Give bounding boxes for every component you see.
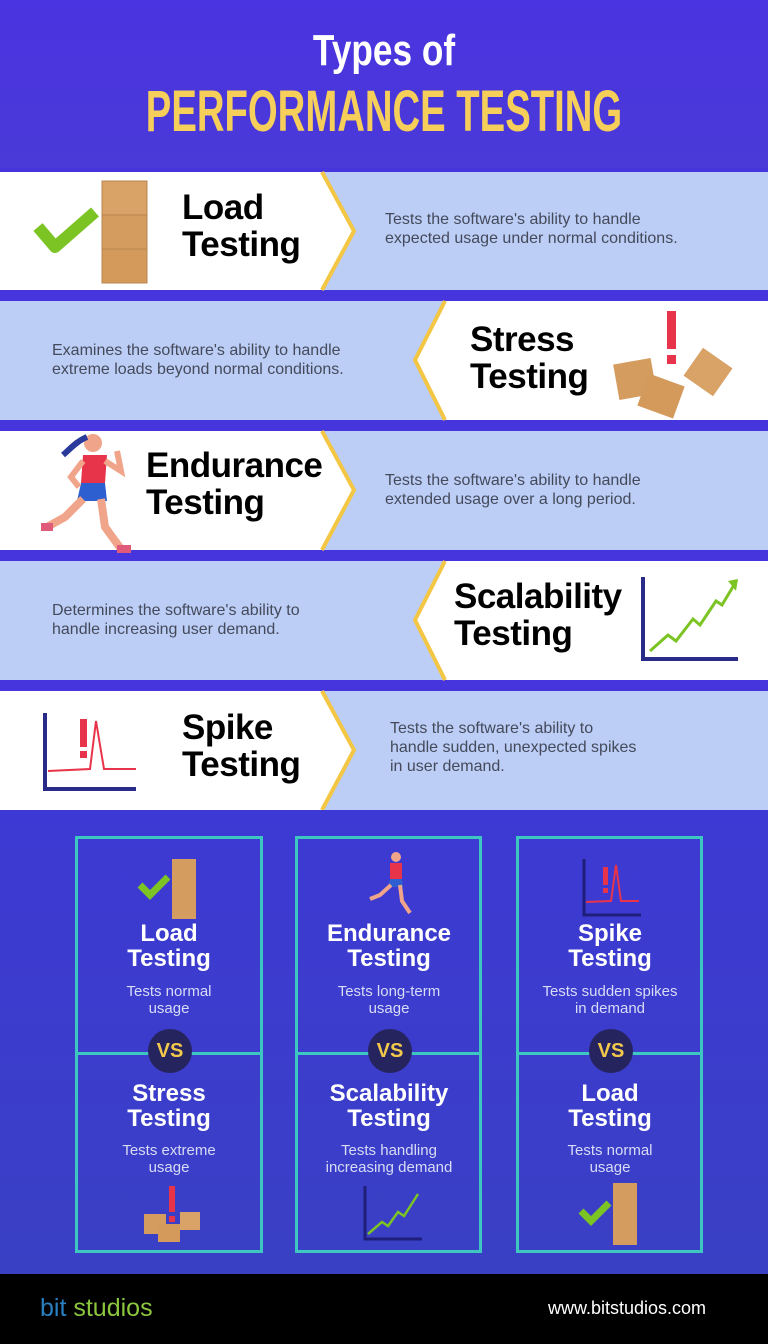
heading: Endurance — [146, 446, 322, 485]
icon: runner — [369, 852, 412, 914]
column 1: Tests extreme — [122, 1142, 216, 1159]
description: extreme loads beyond normal conditions. — [52, 361, 344, 378]
description — [52, 342, 344, 378]
description: Tests the software's ability to — [390, 720, 593, 737]
row: endurance testing — [41, 434, 641, 553]
description: Determines the software's ability to — [52, 602, 300, 619]
description: Examines the software's ability to handle — [52, 342, 341, 359]
column 3: in demand — [575, 1000, 645, 1017]
icon: spike chart — [43, 713, 136, 791]
column 2: Testing — [347, 945, 431, 972]
icon: check and boxes — [34, 180, 148, 284]
column 2 — [295, 836, 482, 1253]
column 1: Tests normal — [126, 983, 212, 1000]
icon: check and boxes — [138, 859, 196, 919]
heading — [182, 188, 300, 264]
description: in user demand. — [390, 758, 505, 775]
header — [0, 0, 768, 168]
header: PERFORMANCE TESTING — [146, 79, 622, 144]
column 3: Load — [581, 1080, 639, 1107]
column 1: Load — [140, 920, 198, 947]
heading: Stress — [470, 320, 574, 359]
column 1: VS — [157, 1040, 183, 1062]
column 2: usage — [369, 1000, 409, 1017]
column 2: Tests long-term — [338, 983, 440, 1000]
website: www.bitstudios.com — [548, 1298, 706, 1318]
column 2: VS — [377, 1040, 403, 1062]
description: handle sudden, unexpected spikes — [390, 739, 636, 756]
heading — [470, 320, 588, 396]
icon: runner — [41, 434, 131, 553]
row: stress testing — [52, 311, 732, 418]
row: load testing — [34, 180, 678, 284]
description: Tests the software's ability to handle — [385, 472, 641, 489]
description: expected usage under normal conditions. — [385, 230, 678, 247]
heading — [146, 446, 322, 522]
description — [385, 472, 641, 508]
description: Tests the software's ability to handle — [385, 211, 641, 228]
row: scalability testing — [52, 577, 738, 661]
description: handle increasing user demand. — [52, 621, 280, 638]
title: Types of — [313, 26, 455, 75]
heading: Testing — [454, 614, 572, 653]
rows background — [0, 171, 768, 810]
column 3: Testing — [568, 1105, 652, 1132]
heading — [454, 577, 622, 653]
column 3: Tests normal — [567, 1142, 653, 1159]
column 2: Testing — [347, 1105, 431, 1132]
description — [390, 720, 636, 775]
description — [385, 211, 678, 247]
column 1: usage — [149, 1159, 189, 1176]
heading: Testing — [146, 483, 264, 522]
comparison panel — [0, 810, 768, 1274]
heading: Testing — [182, 225, 300, 264]
column 3: Spike — [578, 920, 642, 947]
column 1: Testing — [127, 1105, 211, 1132]
heading — [182, 708, 300, 784]
column 2: Tests handling — [341, 1142, 437, 1159]
footer — [0, 1274, 768, 1344]
column 2: increasing demand — [326, 1159, 452, 1176]
column 3 — [516, 836, 703, 1253]
description — [52, 602, 300, 638]
column 1: Testing — [127, 945, 211, 972]
icon: spike chart — [582, 859, 641, 916]
heading: Scalability — [454, 577, 622, 616]
column 3: Tests sudden spikes — [542, 983, 678, 1000]
column 3: Testing — [568, 945, 652, 972]
heading: Spike — [182, 708, 273, 747]
column 3: usage — [590, 1159, 630, 1176]
heading: Load — [182, 188, 264, 227]
column 1: usage — [149, 1000, 189, 1017]
heading: Testing — [182, 745, 300, 784]
column 1 — [75, 836, 263, 1253]
icon: scattered boxes — [613, 311, 732, 418]
logo: bit studios — [40, 1294, 153, 1322]
heading: Testing — [470, 357, 588, 396]
column 2: Scalability — [330, 1080, 448, 1107]
column 2: Endurance — [327, 920, 451, 947]
description: extended usage over a long period. — [385, 491, 636, 508]
column 3: VS — [598, 1040, 624, 1062]
row: spike testing — [43, 708, 636, 791]
column 1: Stress — [132, 1080, 206, 1107]
icon: growth chart — [641, 577, 738, 661]
